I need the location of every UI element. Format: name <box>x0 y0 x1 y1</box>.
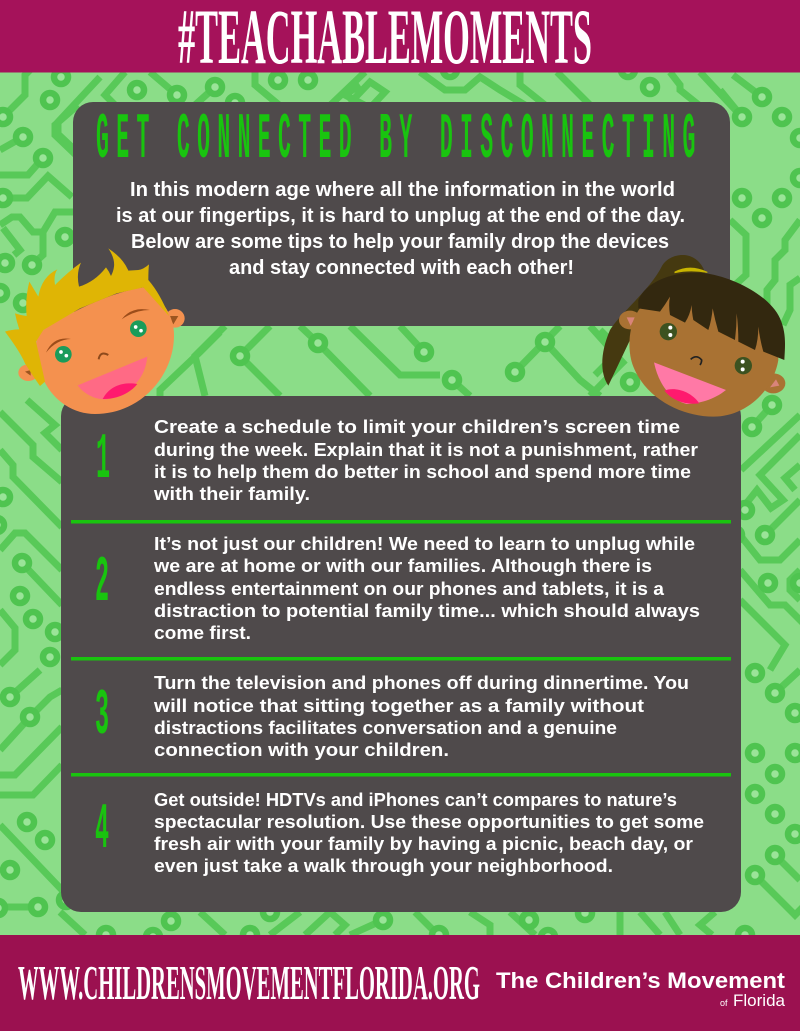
tip 4: fresh air with your family by having a picnic, beach day, or <box>154 833 693 854</box>
icon: boy face <box>5 248 185 414</box>
intro text <box>116 178 685 279</box>
logo: The Children's Movement of Florida: The Children’s Movement <box>496 968 786 993</box>
tip 4: Get outside! HDTVs and iPhones can’t compares to nature’s <box>154 789 677 810</box>
header bar <box>0 0 800 72</box>
tip 2: come first. <box>154 622 251 643</box>
tip 1: during the week. Explain that it is not a punishment, rather <box>154 439 698 460</box>
panel: intro <box>73 102 730 326</box>
tip 1: it is to help them do better in school and spend more time <box>154 461 691 482</box>
intro text: and stay connected with each other! <box>229 256 574 279</box>
tip 4: even just take a walk through your neighborhood. <box>154 855 613 876</box>
intro heading: GET CONNECTED BY DISCONNECTING <box>96 103 703 177</box>
tip 1: Create a schedule to limit your children’s screen time <box>154 416 680 437</box>
tip 3: Turn the television and phones off during dinnertime. You <box>154 672 689 693</box>
intro text: Below are some tips to help your family drop the devices <box>131 230 669 253</box>
icon: girl face <box>602 255 785 417</box>
logo: The Children's Movement of Florida <box>496 968 786 1010</box>
tip 2 <box>95 533 700 643</box>
tip 4: spectacular resolution. Use these opportunities to get some <box>154 811 704 832</box>
tip 2: endless entertainment on our phones and tablets, it is a <box>154 578 665 599</box>
tip 2: It’s not just our children! We need to learn to unplug while <box>154 533 695 554</box>
tip 2: distraction to potential family time... which should always <box>154 600 700 621</box>
tip 4 <box>95 789 704 876</box>
tip 3: will notice that sitting together as a family without <box>153 695 644 716</box>
tip 3: distractions facilitates conversation and a genuine <box>154 717 617 738</box>
tip 2: we are at home or with our families. Although there is <box>153 555 652 576</box>
intro text: In this modern age where all the information in the world <box>130 178 675 201</box>
logo: The Children's Movement of Florida: of <box>720 998 728 1008</box>
tip 2: 2 <box>95 545 109 620</box>
logo: The Children's Movement of Florida: Florida <box>733 991 786 1010</box>
tip 1 <box>96 416 698 504</box>
tip 3: 3 <box>95 678 109 753</box>
footer bar <box>0 935 800 1031</box>
tip 3: connection with your children. <box>154 739 449 760</box>
tip 4: 4 <box>95 792 109 867</box>
tip 1: with their family. <box>153 483 310 504</box>
tip 1: 1 <box>96 422 110 497</box>
panel: tips <box>61 396 741 912</box>
intro text: is at our fingertips, it is hard to unplug at the end of the day. <box>116 204 685 227</box>
tip 3 <box>95 672 689 760</box>
